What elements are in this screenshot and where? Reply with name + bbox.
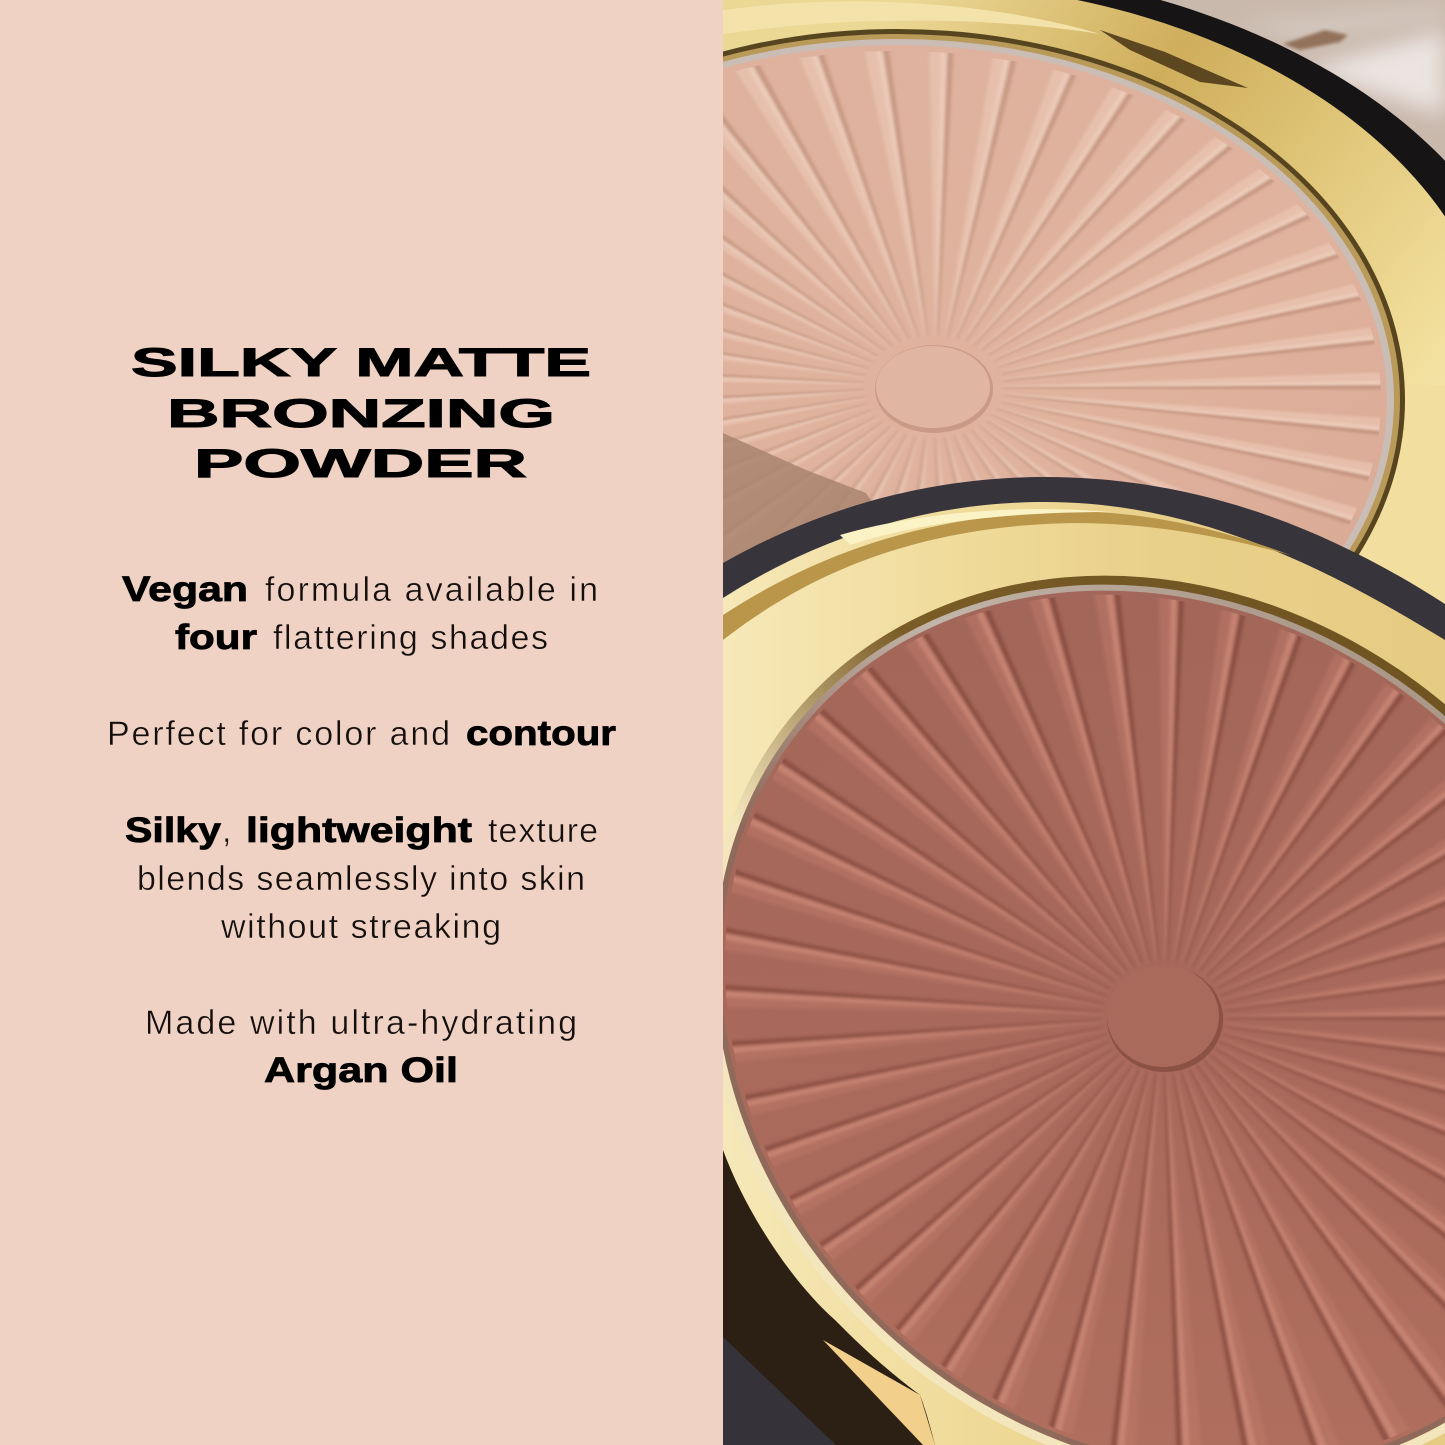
- text block: vegan formula: four: [175, 618, 257, 657]
- text block: argan oil: Made with ultra-hydrating: [145, 1004, 577, 1042]
- text block: color and contour: contour: [466, 714, 616, 753]
- text block: silky texture: lightweight: [246, 811, 472, 850]
- compact black rim: [256, 0, 1445, 806]
- text block: argan oil: Argan Oil: [264, 1051, 458, 1090]
- embossed sunburst rays: [723, 51, 1380, 524]
- gold reflection on case: [823, 1340, 935, 1445]
- rosette: bottom pan: [1107, 965, 1223, 1072]
- title: [131, 341, 591, 486]
- compact gold ring: [300, 0, 1445, 788]
- text block: silky texture: ,: [222, 812, 231, 850]
- panel: product photo of two bronzer compacts: [723, 0, 1445, 1445]
- top compact: [723, 0, 1445, 604]
- text block: color and contour: Perfect for color and: [107, 715, 450, 753]
- embossed sunburst rays: [726, 594, 1445, 1445]
- inner dark lip: [521, 388, 1445, 1445]
- bottom compact: [723, 477, 1445, 1445]
- text block: silky texture: texture: [488, 812, 598, 850]
- silver pan rim: [534, 400, 1445, 1445]
- pan: deep bronzer: [542, 409, 1445, 1445]
- compact dark rim: [723, 477, 1445, 1445]
- rosette: top pan: [875, 345, 993, 433]
- text block: vegan formula: Vegan: [122, 570, 248, 609]
- text block: silky texture: Silky: [125, 811, 222, 850]
- pan: light bronzer: [407, 45, 1387, 755]
- title: BRONZING: [167, 392, 555, 436]
- dark case base, lower left: [723, 1100, 1000, 1445]
- text block: vegan formula: [122, 570, 598, 657]
- inner dark lip: [389, 29, 1405, 771]
- title: POWDER: [194, 442, 527, 486]
- cast shadow on top pan: [723, 433, 871, 563]
- gold ring continuation lower right: [1340, 385, 1445, 655]
- marble background: [723, 0, 1445, 300]
- text block: silky texture: [125, 811, 598, 946]
- text block: vegan formula: flattering shades: [273, 619, 548, 657]
- text block: argan oil: [145, 1004, 577, 1090]
- text block: silky texture: without streaking: [220, 908, 501, 946]
- title: SILKY MATTE: [131, 341, 591, 385]
- gold ring highlights: [723, 2, 1248, 88]
- panel: product copy: [0, 0, 723, 1445]
- text block: vegan formula: formula available in: [265, 571, 598, 609]
- text block: color and contour: [107, 714, 616, 753]
- ring highlight streaks: [723, 509, 1290, 640]
- compact gold ring: [723, 502, 1445, 1445]
- table surface, bottom left corner: [723, 1337, 836, 1445]
- silver pan rim: [400, 39, 1394, 761]
- text block: silky texture: blends seamlessly into skin: [137, 860, 585, 898]
